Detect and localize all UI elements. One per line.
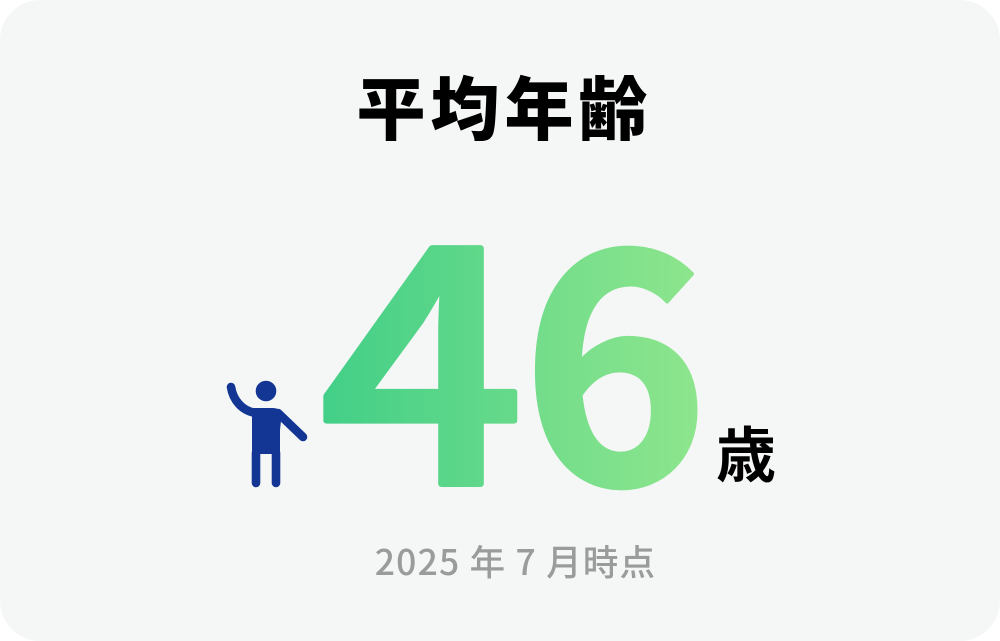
footnote: date: 2025 年 7 月時点 (375, 535, 656, 586)
title: 平均年齢 (356, 54, 652, 154)
big number 46: 4 (320, 114, 525, 577)
unit: age: 歳 (716, 408, 776, 495)
big number 46 (320, 114, 709, 577)
big number 46: 6 (521, 121, 709, 575)
icon: person waving (231, 381, 303, 483)
